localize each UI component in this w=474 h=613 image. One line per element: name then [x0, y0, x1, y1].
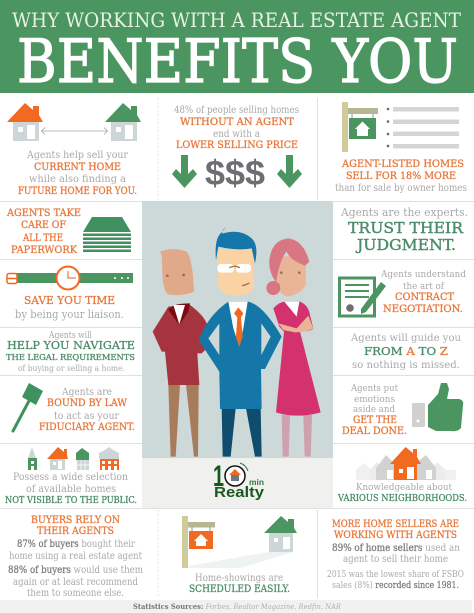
icon: thumbs up [412, 383, 463, 431]
icon: down arrow right [277, 155, 302, 188]
icon: paper stack [83, 217, 131, 252]
text: understand contract negotiation [380, 269, 466, 315]
text: knowledgeable about: Knowledgeable about [356, 482, 452, 493]
text: bound by law: FIDUCIARY AGENT. [39, 421, 135, 433]
text: possess a wide selection: NOT VISIBLE TO THE PUBLIC. [5, 496, 137, 506]
text: agents put emotions aside: aside and [353, 404, 395, 415]
icon: down arrow left [172, 155, 197, 188]
panel: buyers rely on their agents: 88% of buyers would use them [8, 565, 143, 576]
text: home-showings are scheduled easily: Home-showings are [195, 572, 283, 584]
text: agents help sell: while also finding a [29, 173, 126, 185]
text: 48 percent without an agent: WITHOUT AN AGENT [180, 116, 294, 128]
text: agents put emotions aside: DEAL DONE. [342, 425, 407, 437]
icon: dollar signs: $$$ [205, 154, 265, 193]
text: agents put emotions aside [342, 383, 407, 437]
panel: various neighborhoods [337, 447, 467, 504]
panel: get the deal done [342, 383, 463, 437]
text: possess a wide selection [5, 471, 137, 506]
text: bound by law: Agents are [61, 386, 112, 398]
panel: more home sellers working with agents: sales (8%) recorded since 1981. [332, 580, 459, 591]
panel: buyers rely on their agents: again or at least recommend [13, 577, 139, 588]
icon: two houses with arrow [7, 103, 141, 141]
panel: legal requirements: of buying or selling a home. [18, 364, 125, 374]
text: possess a wide selection: of available homes [26, 483, 116, 495]
icon: contract with pen [340, 278, 386, 316]
panel: buyers rely on their agents: home using a real estate agent [9, 551, 142, 562]
panel: legal requirements: Agents will [48, 331, 92, 341]
panel: buyers rely on their agents [8, 514, 143, 599]
text: understand contract negotiation: the art of [403, 281, 445, 292]
text: sell for 18 percent more: AGENT-LISTED HOMES [341, 158, 464, 170]
icon: gavel [13, 383, 43, 431]
figure: man in blue suit [199, 227, 282, 457]
logo: 10 min realty: Realty [214, 484, 265, 501]
text: bound by law: BOUND BY LAW [47, 397, 127, 409]
logo: 10 min realty: 1 [213, 460, 224, 493]
text: statistics sources: Statistics Sources: Forbes, Realtor Magazine, Redfin, NAR [133, 602, 341, 611]
panel: more home sellers working with agents [327, 518, 464, 591]
header banner [0, 0, 474, 97]
text: knowledgeable about [337, 482, 467, 504]
panel: buyers rely on their agents: THEIR AGENTS [37, 525, 114, 537]
text: sell for 18 percent more: SELL FOR 18% MORE [346, 170, 456, 182]
panel: buyers rely on their agents: BUYERS RELY ON [31, 514, 120, 526]
panel: legal requirements: THE LEGAL REQUIREMENTS [6, 353, 135, 363]
panel: from a to z: so nothing is missed. [352, 359, 460, 371]
panel: trust their judgment: Agents are the experts. [340, 205, 468, 219]
text: bound by law: to act as your [54, 410, 120, 422]
text: 48 percent without an agent: LOWER SELLING PRICE [176, 139, 298, 151]
figure: man in red jacket [153, 249, 214, 457]
text: agents help sell: FUTURE HOME FOR YOU. [18, 185, 137, 197]
panel: trust their judgment [340, 205, 468, 254]
text: understand contract negotiation: Agents understand [380, 269, 466, 280]
panel: contract negotiation [340, 269, 466, 316]
text: understand contract negotiation: CONTRACT [395, 291, 454, 303]
panel: from a to z [350, 332, 461, 371]
panel: home-showings scheduled easily [182, 516, 297, 595]
logo: 10 min realty: min [249, 478, 264, 487]
text: agents put emotions aside: GET THE [353, 414, 397, 426]
panel: more home sellers working with agents: 89% of home sellers used an [332, 543, 460, 554]
panel: sell current home and find future home [7, 103, 141, 197]
text: agents take care of all the paperwork: CARE OF [21, 219, 66, 231]
panel: trust their judgment: JUDGMENT. [355, 236, 456, 254]
panel: wide selection of homes [5, 447, 137, 506]
sources footer [0, 600, 474, 613]
panel: lower selling price [172, 104, 302, 193]
panel: agent-listed homes [335, 102, 467, 194]
panel: agents illustration [142, 201, 333, 458]
panel: from a to z: FROM A TO Z [364, 345, 448, 358]
text: 48 percent without an agent: end with a [213, 128, 260, 140]
panel: legal requirements: HELP YOU NAVIGATE [7, 338, 135, 352]
text: knowledgeable about: VARIOUS NEIGHBORHOODS. [337, 494, 467, 504]
text: agents take care of all the paperwork: AGENTS TAKE [6, 207, 81, 219]
panel: 10 min realty logo [142, 458, 333, 508]
illustration: three people [153, 227, 321, 457]
panel: paperwork [6, 207, 131, 256]
text: agents take care of all the paperwork: PAPERWORK [11, 244, 77, 256]
text: save you time: SAVE YOU TIME [24, 293, 115, 307]
text: save you time: by being your liaison. [15, 307, 124, 321]
text: agents take care of all the paperwork: ALL THE [22, 232, 63, 244]
icon: for sale sign with list [342, 102, 459, 152]
text: possess a wide selection: Possess a wide selection [13, 471, 128, 483]
icon: row of four houses [28, 447, 119, 470]
panel: more home sellers working with agents: WORKING WITH AGENTS [334, 529, 457, 541]
text: agents take care of all the paperwork [6, 207, 81, 256]
text: agents help sell: Agents help sell your [26, 149, 129, 161]
panel: trust their judgment: TRUST THEIR [348, 219, 464, 237]
panel: buyers rely on their agents: 87% of buyers bought their [17, 539, 135, 550]
panel: legal requirements [6, 331, 135, 374]
panel: buyers rely on their agents: them to someone else. [27, 588, 124, 599]
logo: 10 min realty [213, 460, 265, 501]
text: agents put emotions aside: Agents put [350, 383, 398, 394]
text: sell for 18 percent more [335, 158, 467, 194]
panel: save you time [7, 266, 133, 321]
text: agents help sell: CURRENT HOME [34, 161, 121, 173]
icon: sign and house [182, 516, 297, 568]
text: agents help sell [18, 149, 137, 197]
text: 48 percent without an agent [174, 104, 299, 151]
text: bound by law [39, 386, 135, 433]
figure: woman in pink dress [266, 238, 321, 457]
text: 48 percent without an agent: 48% of people selling homes [174, 104, 299, 116]
text: save you time [15, 293, 124, 321]
text: understand contract negotiation: NEGOTIATION. [383, 303, 463, 315]
icon: wristwatch [7, 266, 133, 290]
text: home-showings are scheduled easily: SCHEDULED EASILY. [189, 583, 290, 595]
panel: more home sellers working with agents: agent to sell their home [343, 554, 448, 565]
icon: neighborhood houses [356, 447, 456, 480]
panel: fiduciary agent [13, 383, 135, 433]
text: home-showings are scheduled easily [189, 572, 290, 595]
panel: from a to z: Agents will guide you [350, 332, 461, 344]
text: agents put emotions aside: emotions [354, 394, 395, 405]
